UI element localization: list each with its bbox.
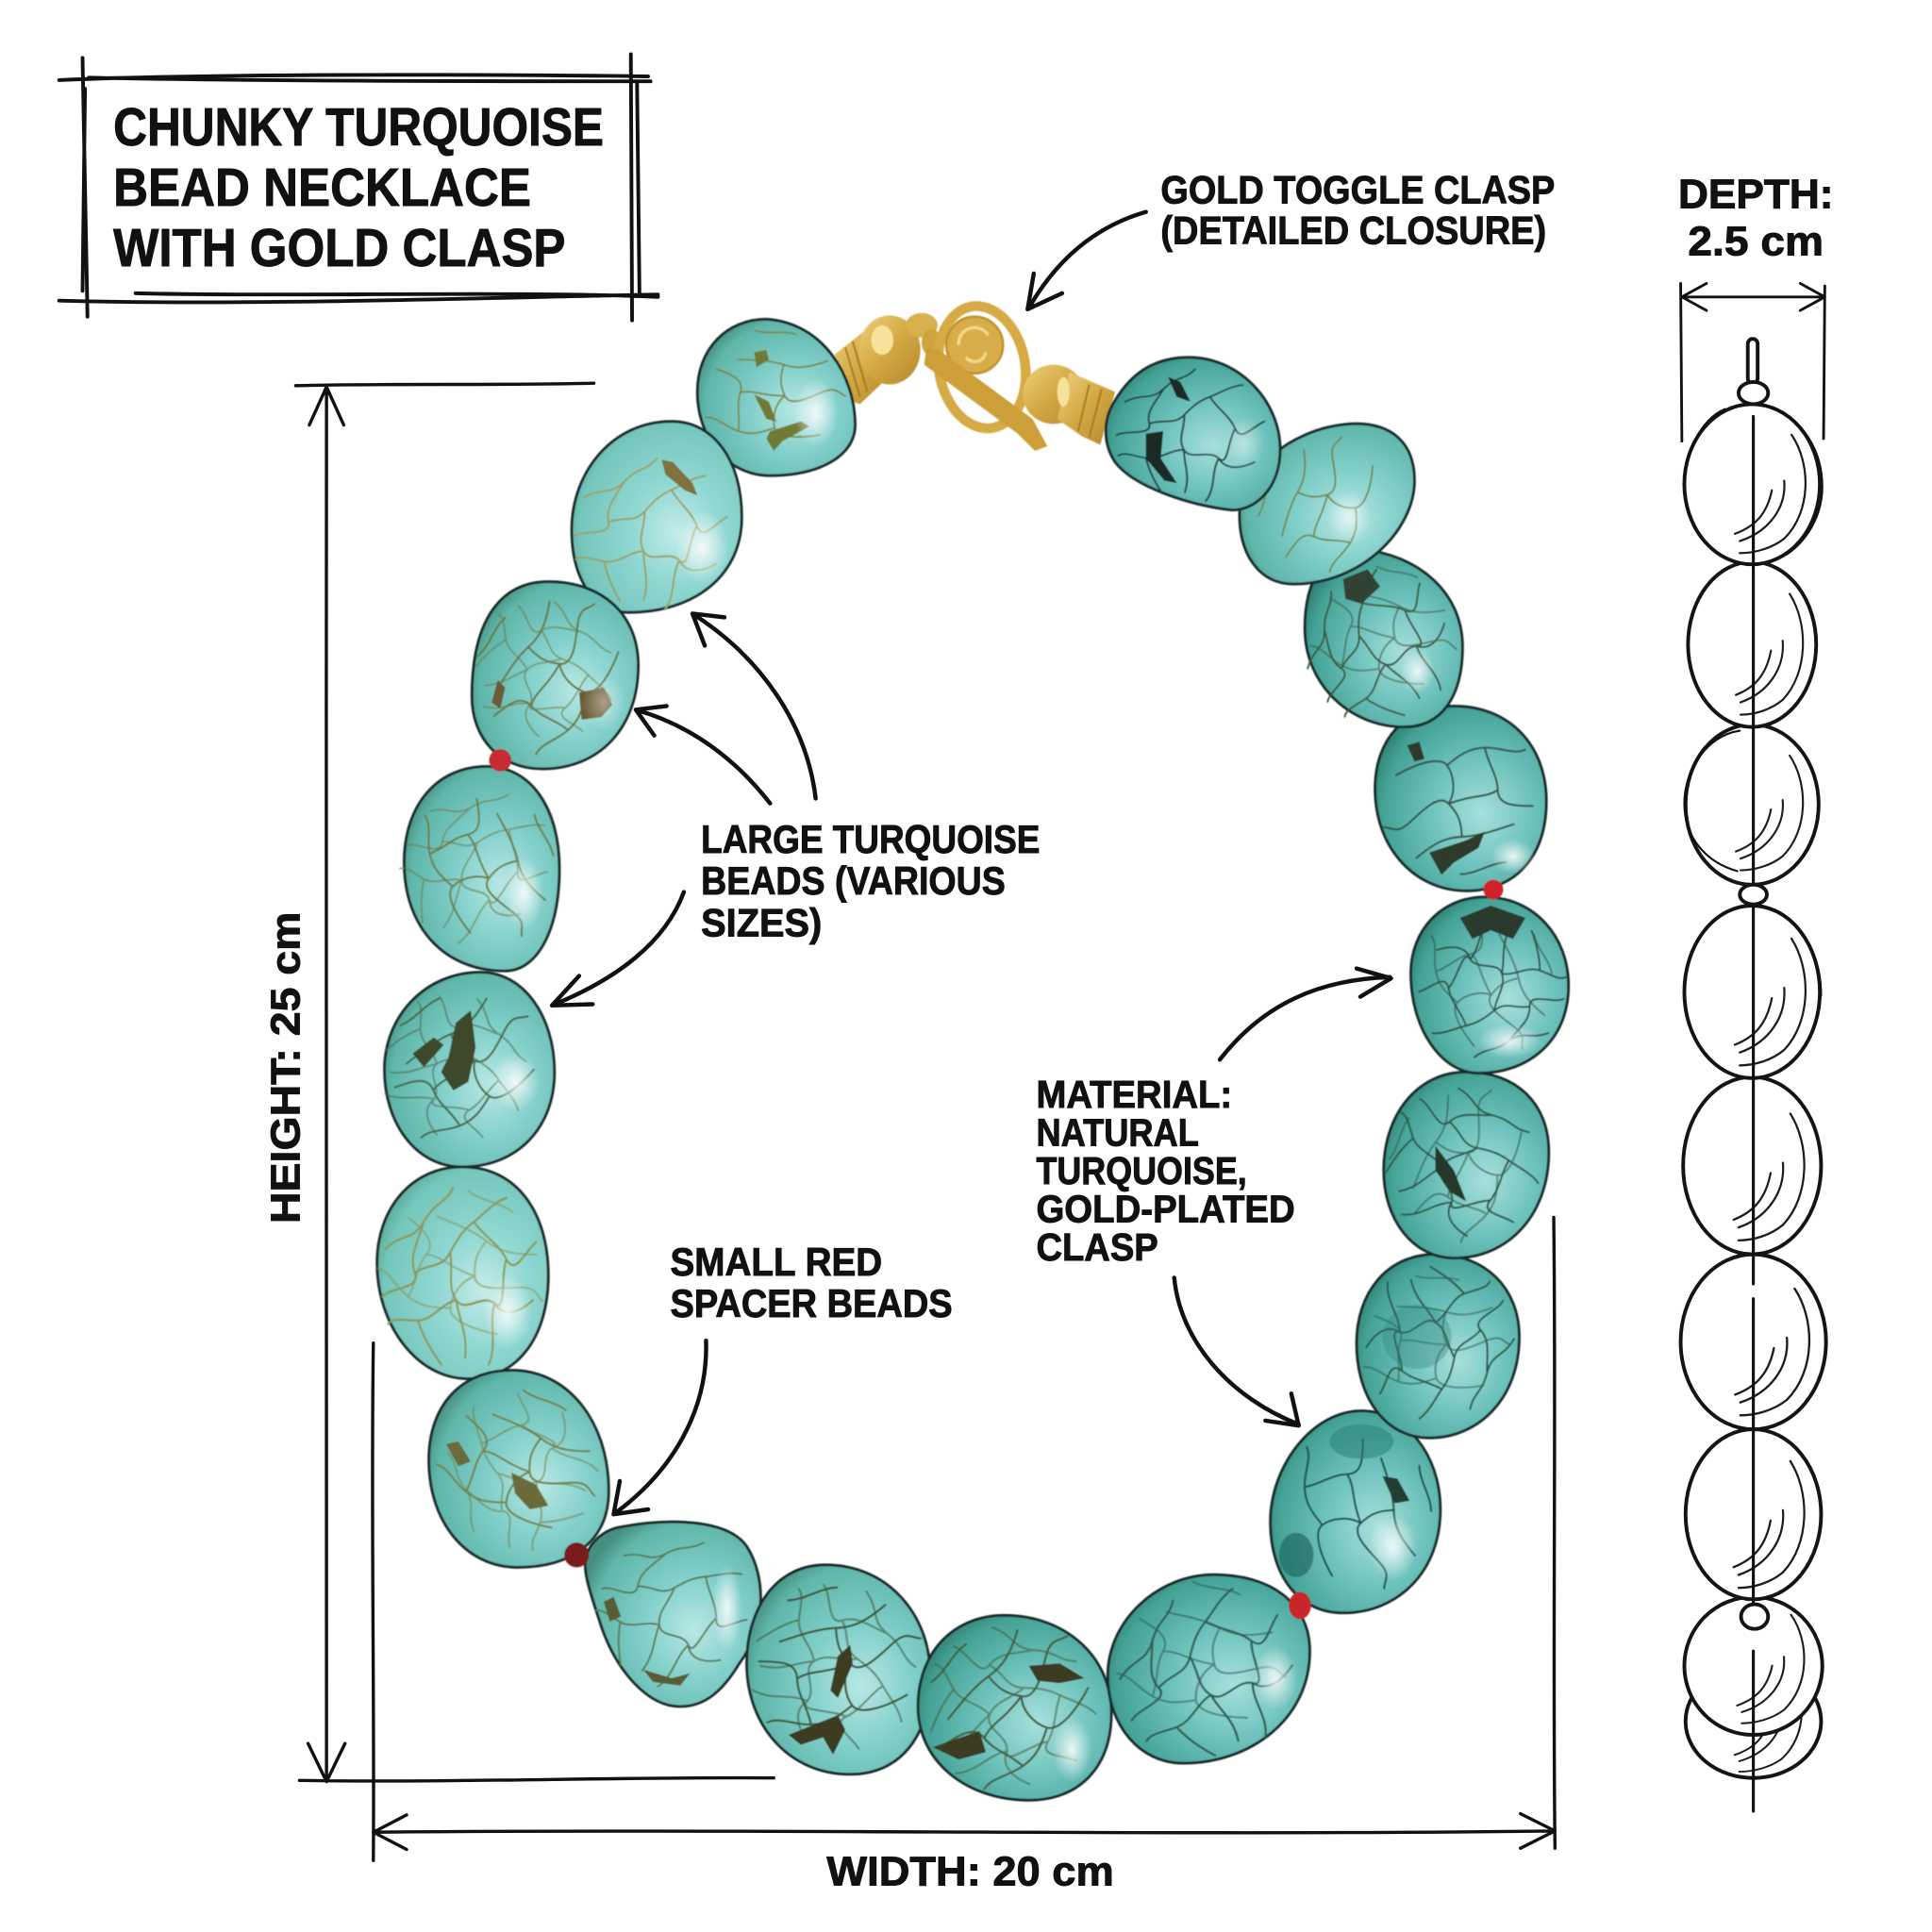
spacer label: SPACER BEADS xyxy=(671,1281,953,1325)
width dimension xyxy=(373,1217,1555,1894)
callout: small red spacer beads xyxy=(613,1240,953,1514)
clasp arrow xyxy=(1027,212,1146,309)
arrow to lower right bead xyxy=(1174,1277,1299,1425)
bead 3 xyxy=(463,581,641,769)
title box xyxy=(59,54,658,321)
spacer ring upper xyxy=(1740,885,1767,905)
bead 9 xyxy=(741,1565,933,1774)
spacer ring lower xyxy=(1741,1605,1768,1629)
side bead 1 xyxy=(1684,404,1823,564)
bead 19 xyxy=(1106,358,1280,510)
side bead 7 xyxy=(1686,1429,1821,1599)
depth arrow and extension lines xyxy=(1681,283,1824,441)
arrow to upper bead xyxy=(692,613,816,798)
large beads label: SIZES) xyxy=(701,901,822,945)
bead 14 xyxy=(1367,1068,1556,1258)
side bead 5 xyxy=(1683,1077,1821,1255)
callout: material xyxy=(1036,969,1391,1425)
large beads label: BEADS (VARIOUS xyxy=(701,858,1006,903)
gold toggle clasp xyxy=(834,299,1115,451)
cord line xyxy=(1752,402,1755,1811)
spacer bead lower left xyxy=(564,1542,589,1567)
depth label: DEPTH: xyxy=(1678,173,1834,218)
callout: large turquoise beads xyxy=(552,613,1040,1006)
spacer bead lower right xyxy=(1289,1592,1311,1619)
spacer bead right xyxy=(1484,880,1503,899)
bead 11 xyxy=(1098,1559,1315,1778)
material label: TURQUOISE, xyxy=(1036,1149,1247,1192)
side bead 8 xyxy=(1684,1597,1823,1735)
side bead 3 xyxy=(1684,724,1819,885)
material label: MATERIAL: xyxy=(1036,1073,1232,1116)
title frame sketch lines xyxy=(59,54,658,321)
height label: HEIGHT: 25 cm xyxy=(263,912,308,1224)
toggle bar xyxy=(924,347,1047,451)
callout: gold toggle clasp xyxy=(1027,168,1555,309)
bead 7 xyxy=(424,1370,613,1567)
top ring xyxy=(1739,382,1768,404)
necklace xyxy=(364,299,1582,1816)
title text: WITH GOLD CLASP xyxy=(113,218,566,277)
arrow to upper right bead xyxy=(1220,969,1391,1059)
side bead 2 xyxy=(1688,562,1816,727)
bead 18 xyxy=(1240,423,1414,588)
side bead 6 xyxy=(1681,1255,1826,1429)
height extension lines and arrow xyxy=(295,383,774,1782)
bead 8 xyxy=(574,1510,770,1708)
material label: GOLD-PLATED xyxy=(1036,1188,1295,1231)
bead 6 xyxy=(364,1167,561,1379)
material label: CLASP xyxy=(1036,1225,1158,1269)
bead 2 xyxy=(564,422,741,618)
bead 4 xyxy=(377,763,571,971)
right clasp ball and cap xyxy=(1023,365,1115,445)
bead 15 xyxy=(1405,897,1582,1079)
bead 1 xyxy=(688,309,859,480)
bead 10 xyxy=(901,1597,1119,1816)
title text: CHUNKY TURQUOISE xyxy=(113,97,604,157)
toggle ring xyxy=(929,299,1035,435)
top pin xyxy=(1748,339,1757,383)
width label: WIDTH: 20 cm xyxy=(826,1849,1114,1894)
arrow to middle bead xyxy=(636,706,770,804)
large beads label: LARGE TURQUOISE xyxy=(701,817,1040,861)
side view of necklace xyxy=(1681,339,1826,1811)
height dimension xyxy=(263,383,774,1782)
arrow to lower bead xyxy=(552,892,684,1006)
bead 16 xyxy=(1372,706,1550,891)
material label: NATURAL xyxy=(1036,1111,1199,1155)
bead 17 xyxy=(1277,547,1476,747)
width extension lines and arrow xyxy=(373,1217,1555,1860)
clasp label: GOLD TOGGLE CLASP xyxy=(1160,168,1555,212)
side bead 4 xyxy=(1684,906,1821,1078)
depth label: 2.5 cm xyxy=(1688,219,1824,264)
spacer bead top left xyxy=(490,749,511,772)
spacer arrow xyxy=(613,1341,707,1514)
bead 13 xyxy=(1345,1247,1534,1438)
depth dimension xyxy=(1678,173,1834,441)
left clasp cap and ball xyxy=(834,313,941,404)
spacer label: SMALL RED xyxy=(671,1240,882,1284)
bead 5 xyxy=(385,973,555,1167)
side bead rear bottom xyxy=(1686,1665,1821,1778)
clasp label: (DETAILED CLOSURE) xyxy=(1160,208,1546,253)
title text: BEAD NECKLACE xyxy=(113,158,531,217)
bead 12 xyxy=(1268,1411,1446,1613)
